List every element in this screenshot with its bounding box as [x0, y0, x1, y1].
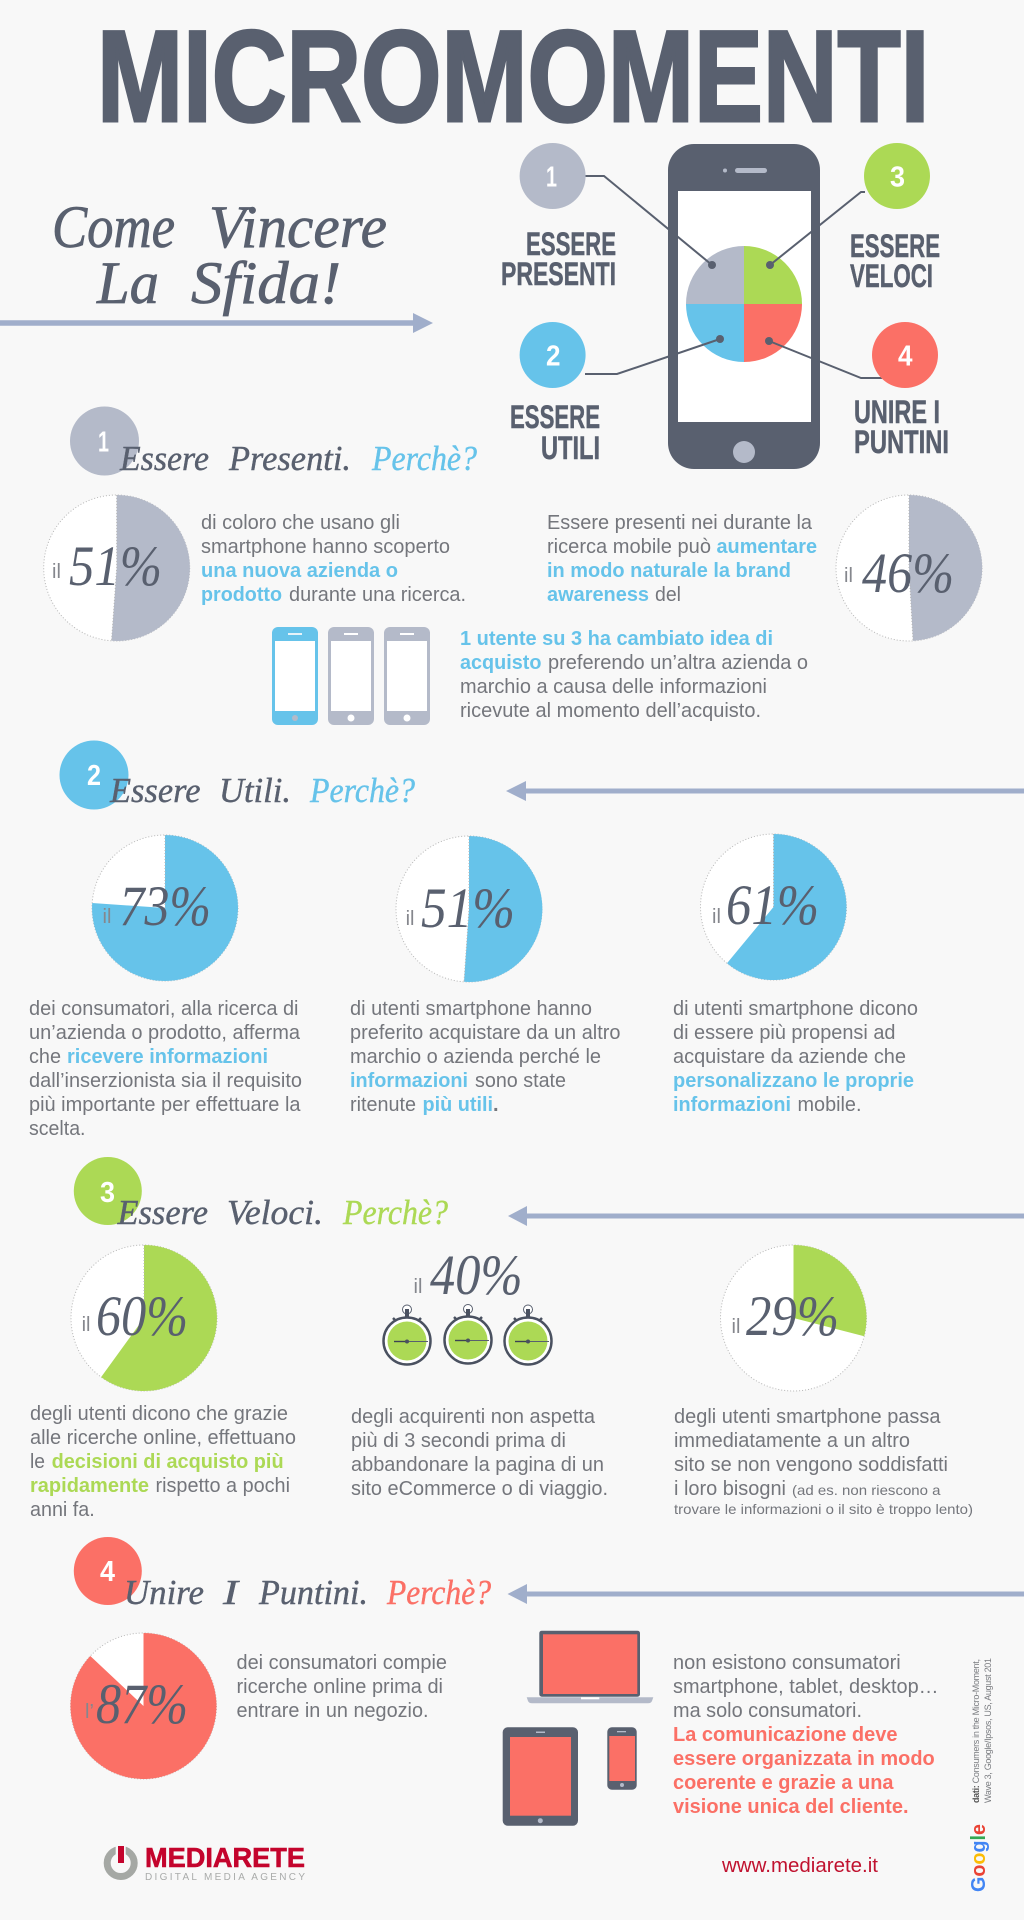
stat: 40 percent: 40% — [430, 1244, 522, 1307]
label: essere veloci: ESSERE — [850, 228, 940, 264]
heading badge 4: 4 — [100, 1556, 115, 1588]
text: ricevere informazioni: dei consumatori, alla ricerca di — [29, 998, 298, 1020]
pie chart: 51 percent utili: il — [406, 908, 414, 930]
pie chart: 46 percent — [836, 495, 982, 641]
heading badge 2: 2 — [87, 760, 101, 792]
stopwatch 1 — [384, 1305, 430, 1364]
logo: google: Google — [968, 1824, 990, 1892]
text: informazioni piu utili — [350, 998, 620, 1116]
text: informazioni piu utili: di utenti smartphone hanno — [350, 998, 592, 1020]
text: consumatori e comunicazione: non esistono consumatori — [673, 1652, 901, 1674]
heading badge 4 — [74, 1537, 142, 1605]
subtitle: come vincere la sfida: Come — [52, 194, 175, 260]
icon: phone body — [668, 144, 820, 469]
heading: essere presenti perche: Presenti. — [228, 439, 351, 478]
pie chart: 61 percent — [700, 834, 846, 980]
icon: power symbol — [107, 1845, 134, 1876]
text: consumatori e comunicazione: ma solo consumatori. — [673, 1700, 862, 1722]
text: decisioni di acquisto: anni fa. — [30, 1499, 95, 1521]
heading: essere presenti perche: Essere — [119, 439, 209, 478]
heading: essere utili perche — [109, 771, 415, 810]
pie chart: 51 percent — [44, 495, 190, 641]
badge 2: 2 — [546, 341, 560, 373]
title: MICROMOMENTI — [97, 4, 929, 149]
text: consumatori e comunicazione: smartphone, tablet, desktop… — [673, 1676, 939, 1698]
badge 3: 3 — [890, 162, 905, 194]
text: passa a un altro sito: (ad es. non riescono a — [792, 1482, 941, 1498]
pie chart: 29 percent: 29% — [746, 1285, 839, 1348]
text: 3 secondi: degli acquirenti non aspetta — [351, 1406, 596, 1428]
text: personalizzano informazioni: informazioni — [673, 1094, 791, 1116]
text: cambiato idea di acquisto: marchio a causa delle informazioni — [460, 676, 767, 698]
label: unire i puntini: PUNTINI — [854, 424, 949, 460]
text: decisioni di acquisto: rispetto a pochi — [156, 1475, 290, 1497]
text: 3 secondi: più di 3 secondi prima di — [351, 1430, 566, 1452]
heading: essere utili perche: Perchè? — [309, 771, 415, 810]
text: ricerche online: entrare in un negozio. — [236, 1700, 428, 1722]
text: informazioni piu utili: più utili — [422, 1094, 493, 1116]
subtitle: come vincere la sfida: Vincere — [209, 194, 387, 260]
label: essere veloci — [850, 228, 940, 294]
text: decisioni di acquisto — [30, 1403, 296, 1521]
badge 1 — [520, 143, 586, 209]
text: informazioni piu utili: preferito acquistare da un altro — [350, 1022, 620, 1044]
phone screen — [678, 191, 811, 422]
logo: mediarete — [107, 1842, 305, 1883]
heading badge 1: 1 — [98, 427, 109, 459]
text: consumatori e comunicazione: essere organizzata in modo — [673, 1748, 935, 1770]
text: scoperta azienda: una nuova azienda o — [201, 560, 398, 582]
logo wordmark: MEDIARETE — [145, 1842, 305, 1873]
text: brand awareness: in modo naturale la brand — [547, 560, 791, 582]
source note — [971, 1658, 993, 1803]
text: ricevere informazioni: dall’inserzionista sia il requisito — [29, 1070, 302, 1092]
text: consumatori e comunicazione — [673, 1652, 939, 1818]
phone diagram with four moments — [501, 143, 949, 469]
text: informazioni piu utili: sono state — [475, 1070, 566, 1092]
pie chart: 51 percent utili — [396, 836, 542, 982]
label: unire i puntini — [854, 394, 949, 460]
pie chart: 87 percent: 87% — [96, 1673, 188, 1736]
pie chart: 60 percent: il — [82, 1314, 90, 1336]
section 4: unire i puntini — [70, 1537, 1024, 1826]
text: passa a un altro sito: degli utenti smartphone passa — [674, 1406, 941, 1428]
label: unire i puntini: UNIRE I — [854, 394, 940, 430]
icon: stopwatches — [384, 1304, 552, 1364]
heading: essere veloci perche — [117, 1193, 448, 1232]
text: brand awareness: ricerca mobile può — [547, 536, 711, 558]
text: cambiato idea di acquisto: acquisto — [460, 652, 542, 674]
text: passa a un altro sito — [674, 1406, 973, 1517]
label: essere presenti: ESSERE — [526, 226, 616, 262]
phone home button — [733, 441, 755, 463]
label: essere veloci: VELOCI — [850, 258, 933, 294]
text: ricevere informazioni: ricevere informazioni — [67, 1046, 268, 1068]
text: ricerche online — [236, 1652, 447, 1722]
arrow: section 3 — [508, 1206, 1024, 1226]
text: personalizzano informazioni — [673, 998, 918, 1116]
text: consumatori e comunicazione: coerente e grazie a una — [673, 1772, 894, 1794]
text: scoperta azienda: prodotto — [201, 584, 282, 606]
pie chart: 46 percent: 46% — [862, 542, 954, 605]
text: personalizzano informazioni: mobile. — [798, 1094, 862, 1116]
text: personalizzano informazioni: di utenti smartphone dicono — [673, 998, 918, 1020]
heading: essere utili perche: Utili. — [219, 771, 291, 810]
text: brand awareness: aumentare — [716, 536, 817, 558]
badge 4 — [872, 322, 938, 388]
text: informazioni piu utili: informazioni — [350, 1070, 468, 1092]
text: decisioni di acquisto: rapidamente — [30, 1475, 149, 1497]
text: informazioni piu utili: ritenute — [350, 1094, 416, 1116]
pie chart: 29 percent — [720, 1245, 867, 1391]
heading: essere veloci perche: Perchè? — [342, 1193, 448, 1232]
source note: dati: Consumers in the Micro-Moment, — [971, 1659, 981, 1803]
text: brand awareness: Essere presenti nei durante la — [547, 512, 813, 534]
text: cambiato idea di acquisto: preferendo un’altra azienda o — [548, 652, 808, 674]
text: scoperta azienda: smartphone hanno scoperto — [201, 536, 450, 558]
label: essere utili — [510, 399, 600, 466]
text: informazioni piu utili: marchio o azienda perché le — [350, 1046, 601, 1068]
text: 3 secondi — [351, 1406, 608, 1500]
subtitle: come vincere la sfida — [52, 194, 387, 316]
label: essere utili: UTILI — [541, 430, 600, 466]
subtitle: come vincere la sfida: La — [96, 250, 159, 316]
icon: laptop — [527, 1631, 653, 1703]
pie chart: 73 percent — [92, 835, 238, 981]
text: personalizzano informazioni: di essere più propensi ad — [673, 1022, 896, 1044]
text: consumatori e comunicazione: La comunicazione deve — [673, 1724, 898, 1746]
badge 4: 4 — [898, 341, 912, 373]
arrow: section 4 — [508, 1584, 1024, 1604]
text: ricerche online: dei consumatori compie — [236, 1652, 447, 1674]
badge 1: 1 — [546, 162, 557, 194]
text: ricevere informazioni: più importante per effettuare la — [29, 1094, 301, 1116]
pie chart: 29 percent: il — [732, 1316, 740, 1338]
heading: unire i puntini perche: Unire — [124, 1573, 204, 1612]
pie chart: 51 percent: il — [52, 561, 61, 583]
text: ricerche online: ricerche online prima di — [236, 1676, 443, 1698]
text: passa a un altro sito: sito se non vengono soddisfatti — [674, 1454, 948, 1476]
icon: tablet — [503, 1727, 578, 1826]
logo tagline: DIGITAL MEDIA AGENCY — [145, 1872, 305, 1883]
heading badge 2 — [60, 740, 128, 810]
pie chart: 51 percent utili: 51% — [421, 877, 515, 940]
text: ricevere informazioni: che — [29, 1046, 61, 1068]
heading badge 1 — [70, 406, 139, 476]
label: essere utili: ESSERE — [510, 399, 600, 435]
stat: 40 percent: il — [414, 1276, 422, 1298]
text: ricevere informazioni: scelta. — [29, 1118, 86, 1140]
badge 2 — [520, 322, 586, 388]
text: brand awareness: del — [655, 584, 681, 606]
text: ricevere informazioni — [29, 998, 302, 1140]
text: consumatori e comunicazione: visione unica del cliente. — [673, 1796, 908, 1818]
pie chart: 51 percent: 51% — [69, 535, 162, 598]
text: passa a un altro sito: i loro bisogni — [674, 1478, 786, 1500]
text: ricevere informazioni: un’azienda o prodotto, afferma — [29, 1022, 301, 1044]
text: decisioni di acquisto: alle ricerche online, effettuano — [30, 1427, 296, 1449]
icon: smartphone — [607, 1727, 637, 1790]
pie chart: 61 percent: 61% — [726, 874, 819, 937]
section 3: essere veloci — [30, 1157, 1024, 1521]
heading: unire i puntini perche: Perchè? — [386, 1573, 491, 1612]
heading badge 3: 3 — [100, 1177, 115, 1209]
arrow: section 2 — [506, 781, 1024, 801]
text: decisioni di acquisto: le — [30, 1451, 45, 1473]
text: brand awareness: awareness — [547, 584, 649, 606]
icon: three phones — [272, 627, 430, 725]
heading: essere utili perche: Essere — [109, 771, 200, 810]
text: personalizzano informazioni: acquistare da aziende che — [673, 1046, 906, 1068]
text: 3 secondi: sito eCommerce o di viaggio. — [351, 1478, 608, 1500]
pie chart: 46 percent: il — [844, 565, 853, 587]
heading: unire i puntini perche: Puntini. — [258, 1573, 368, 1612]
connector lines — [585, 176, 882, 378]
text: decisioni di acquisto: decisioni di acquisto più — [52, 1451, 284, 1473]
text: brand awareness — [547, 512, 817, 606]
heading: essere veloci perche: Veloci. — [227, 1193, 323, 1232]
pie chart: 73 percent: 73% — [120, 875, 211, 938]
stopwatch 3 — [504, 1305, 552, 1364]
section 2: essere utili — [29, 740, 1024, 1140]
heading: unire i puntini perche: I — [222, 1573, 241, 1612]
website url: www.mediarete.it — [721, 1855, 878, 1877]
heading: essere presenti perche: Perchè? — [371, 439, 477, 478]
text: passa a un altro sito: trovare le informazioni o il sito è troppo lento) — [674, 1501, 973, 1517]
pie chart: 60 percent: 60% — [96, 1285, 188, 1348]
text: 3 secondi: abbandonare la pagina di un — [351, 1454, 604, 1476]
text: scoperta azienda: di coloro che usano gli — [201, 512, 400, 534]
stopwatch 2 — [444, 1304, 492, 1364]
heading: essere presenti perche — [119, 439, 477, 478]
text: cambiato idea di acquisto — [460, 628, 808, 722]
pie chart: 61 percent: il — [712, 906, 721, 928]
phone camera — [723, 168, 727, 172]
subtitle: come vincere la sfida: Sfida! — [191, 250, 341, 316]
heading: essere veloci perche: Essere — [117, 1193, 208, 1232]
text: decisioni di acquisto: degli utenti dicono che grazie — [30, 1403, 288, 1425]
heading badge 3 — [74, 1157, 142, 1225]
pie chart: 73 percent: il — [102, 906, 111, 928]
label: essere presenti: PRESENTI — [501, 256, 616, 292]
source note: Wave 3, Google/Ipsos, US, August 201 — [983, 1658, 993, 1803]
pie chart: four quadrants — [686, 246, 802, 362]
phone speaker — [735, 168, 767, 173]
text: cambiato idea di acquisto: ricevute al momento dell’acquisto. — [460, 700, 761, 722]
heading: unire i puntini perche — [124, 1573, 491, 1612]
pie chart: 87 percent: l’ — [85, 1701, 94, 1723]
text: informazioni piu utili: . — [493, 1094, 499, 1116]
text: personalizzano informazioni: personalizzano le proprie — [673, 1070, 914, 1092]
text: scoperta azienda — [201, 512, 466, 606]
pie chart: 60 percent — [71, 1245, 217, 1391]
text: scoperta azienda: durante una ricerca. — [289, 584, 466, 606]
section 1: essere presenti — [44, 406, 982, 725]
text: passa a un altro sito: immediatamente a un altro — [674, 1430, 910, 1452]
label: essere presenti — [501, 226, 616, 292]
pie chart: 87 percent — [70, 1633, 217, 1779]
badge 3 — [864, 143, 930, 209]
text: cambiato idea di acquisto: 1 utente su 3 ha cambiato idea di — [460, 628, 773, 650]
arrow: pointing right to phone — [0, 313, 433, 333]
